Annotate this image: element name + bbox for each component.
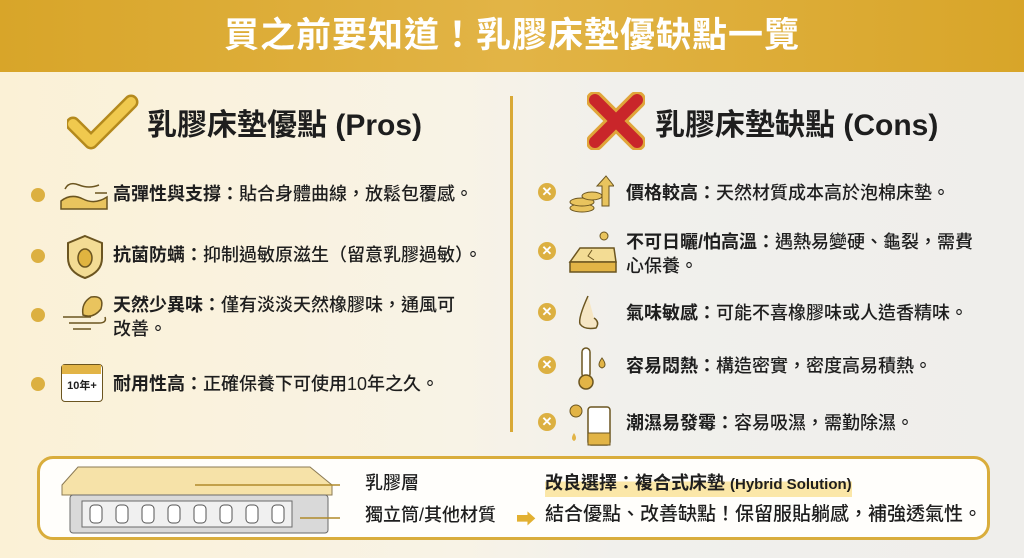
item 2: 不可日曬/怕高溫：遇熱易變硬、龜裂，需費: [626, 232, 973, 252]
panel: hybrid solution: [37, 456, 990, 540]
item 2: 心保養。: [626, 256, 698, 276]
title bar: [0, 0, 1024, 72]
item 1: [538, 175, 950, 212]
item 4: 耐用性高：正確保養下可使用10年之久。: [113, 374, 439, 394]
item 4: [31, 364, 439, 402]
solution text: 改良選擇：複合式床墊 (Hybrid Solution): [545, 473, 852, 493]
item 3: 天然少異味：僅有淡淡天然橡膠味，通風可: [113, 295, 455, 315]
item 5: ✕: [542, 414, 552, 429]
divider: [510, 96, 513, 432]
item 3: [31, 295, 455, 339]
item 1: ✕: [542, 184, 552, 199]
item 2: [31, 234, 482, 279]
item 4: ✕: [542, 357, 552, 372]
item 3: 氣味敏感：可能不喜橡膠味或人造香精味。: [626, 303, 968, 323]
item 3: [538, 296, 968, 330]
panel: hybrid solution: 獨立筒/其他材質: [365, 505, 496, 525]
mattress illustration: [62, 466, 340, 534]
icon: x: [587, 92, 645, 150]
icon: check: [67, 94, 138, 150]
labels: layers: 乳膠層: [365, 473, 419, 493]
item 4: [538, 347, 932, 390]
item 2: ✕: [542, 243, 552, 258]
item 4: 容易悶熱：構造密實，密度高易積熱。: [626, 356, 932, 376]
item 2: [538, 232, 973, 276]
panel: pros: [31, 94, 482, 402]
item 5: 潮濕易發霉：容易吸濕，需勤除濕。: [626, 413, 914, 433]
item 1: 價格較高：天然材質成本高於泡棉床墊。: [626, 183, 950, 203]
heading: pros: 乳膠床墊優點 (Pros): [147, 109, 422, 142]
item 1: [31, 182, 473, 210]
title bar: 買之前要知道！乳膠床墊優缺點一覽: [224, 16, 800, 55]
panel: hybrid solution: 結合優點、改善缺點！保留服貼躺感，補強透氣性。: [545, 504, 982, 525]
item 1: 高彈性與支撐：貼合身體曲線，放鬆包覆感。: [113, 184, 473, 204]
item 4: 10年+: [67, 380, 97, 392]
item 3: ✕: [542, 304, 552, 319]
arrow: ➡: [516, 509, 536, 531]
item 3: 改善。: [113, 319, 167, 339]
heading: cons: 乳膠床墊缺點 (Cons): [655, 109, 938, 142]
panel: cons: [538, 92, 973, 446]
item 5: [538, 404, 914, 446]
item 2: 抗菌防螨：抑制過敏原滋生（留意乳膠過敏）。: [113, 245, 482, 265]
